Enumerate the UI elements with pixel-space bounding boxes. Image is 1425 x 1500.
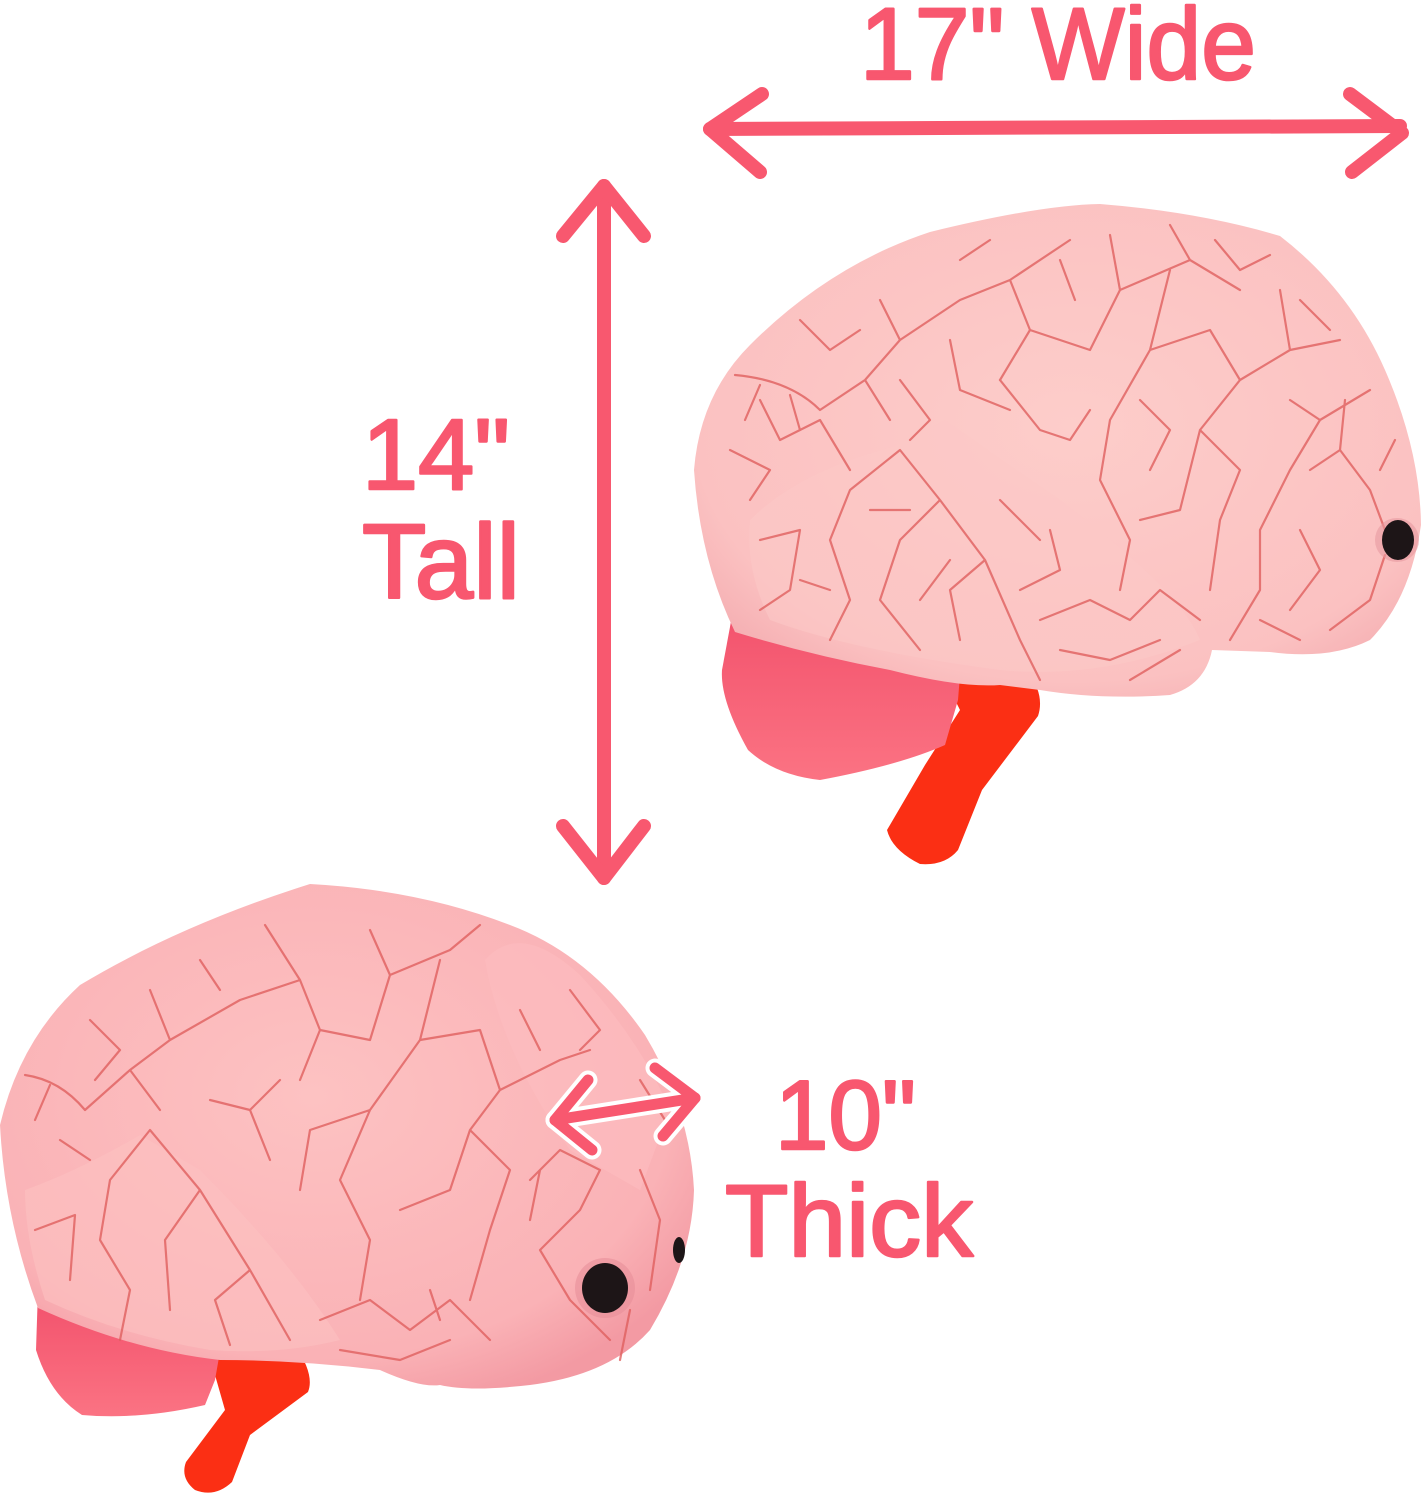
label: 14 inch tall <box>362 399 520 621</box>
brainstem <box>184 1340 310 1493</box>
cerebrum <box>694 204 1421 697</box>
cerebellum <box>722 600 962 780</box>
cerebrum <box>0 884 694 1388</box>
cerebellum <box>36 1290 222 1416</box>
arrow: width <box>710 94 1402 172</box>
label: 10 inch thick: Thick <box>725 1164 974 1278</box>
arrow: thickness <box>555 1068 695 1150</box>
temporal lobe fold <box>25 1135 340 1351</box>
plush brain: side view <box>694 204 1421 864</box>
frontal lobe fold <box>485 943 670 1190</box>
temporal lobe fold <box>749 420 1200 672</box>
plush brain: angled view <box>0 884 694 1493</box>
far eye <box>673 1237 685 1263</box>
eye <box>575 1258 635 1318</box>
label: 14 inch tall: 14" <box>362 399 510 511</box>
brainstem <box>887 672 1040 864</box>
veins <box>25 925 665 1360</box>
eye <box>1375 518 1419 562</box>
label: 14 inch tall: Tall <box>362 503 520 621</box>
arrow: height <box>563 186 644 878</box>
label: 10 inch thick <box>725 1060 974 1278</box>
veins <box>730 225 1395 680</box>
label: 10 inch thick: 10" <box>775 1060 916 1170</box>
